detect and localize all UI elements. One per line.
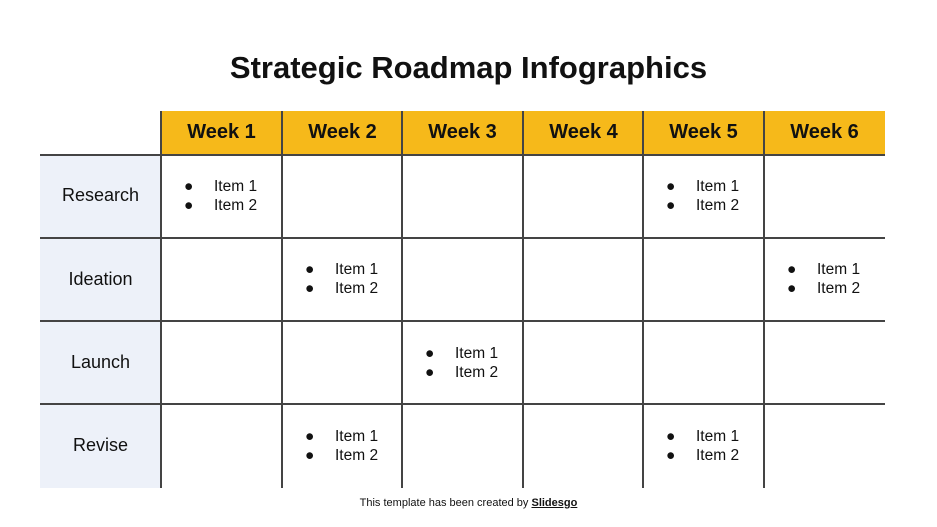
- items: ideation week6: ●: [787, 261, 796, 278]
- items: revise week2: [305, 428, 378, 464]
- header: weeks: Week 1: [187, 121, 256, 143]
- items: research week5: Item 1: [696, 178, 739, 195]
- row labels: Research: [62, 185, 139, 205]
- items: launch week3: Item 1: [455, 345, 498, 362]
- items: ideation week2: ●: [305, 280, 314, 297]
- row labels: Launch: [71, 352, 130, 372]
- header: weeks: Week 2: [308, 121, 377, 143]
- items: revise week5: ●: [666, 447, 675, 464]
- items: research week1: ●: [184, 197, 193, 214]
- items: revise week2: Item 2: [335, 447, 378, 464]
- items: launch week3: ●: [425, 364, 434, 381]
- items: research week1: ●: [184, 178, 193, 195]
- items: revise week2: Item 1: [335, 428, 378, 445]
- header: weeks: Week 6: [790, 121, 859, 143]
- items: launch week3: Item 2: [455, 364, 498, 381]
- footer credit: This template has been created by Slidesgo: [360, 497, 577, 509]
- items: ideation week2: Item 1: [335, 261, 378, 278]
- title: Strategic Roadmap Infographics: [230, 50, 707, 85]
- items: ideation week6: ●: [787, 280, 796, 297]
- items: research week5: ●: [666, 197, 675, 214]
- items: research week5: [666, 178, 739, 214]
- row labels: [62, 185, 139, 455]
- items: launch week3: [425, 345, 498, 381]
- items: research week5: ●: [666, 178, 675, 195]
- items: revise week2: ●: [305, 447, 314, 464]
- items: revise week5: [666, 428, 739, 464]
- items: ideation week2: [305, 261, 378, 297]
- items: ideation week2: Item 2: [335, 280, 378, 297]
- items: research week1: Item 1: [214, 178, 257, 195]
- row labels: Ideation: [68, 269, 133, 289]
- items: launch week3: ●: [425, 345, 434, 362]
- items: ideation week6: Item 1: [817, 261, 860, 278]
- header: weeks: Week 3: [428, 121, 497, 143]
- items: ideation week6: Item 2: [817, 280, 860, 297]
- items: ideation week2: ●: [305, 261, 314, 278]
- items: revise week5: ●: [666, 428, 675, 445]
- items: revise week5: Item 1: [696, 428, 739, 445]
- items: revise week2: ●: [305, 428, 314, 445]
- header: weeks: Week 5: [669, 121, 738, 143]
- row label column background: [40, 154, 161, 488]
- header: weeks: [162, 111, 885, 154]
- items: research week5: Item 2: [696, 197, 739, 214]
- items: revise week5: Item 2: [696, 447, 739, 464]
- items: ideation week6: [787, 261, 860, 297]
- header: weeks: Week 4: [549, 121, 618, 143]
- row labels: Revise: [73, 435, 128, 455]
- items: research week1: [184, 178, 257, 214]
- items: research week1: Item 2: [214, 197, 257, 214]
